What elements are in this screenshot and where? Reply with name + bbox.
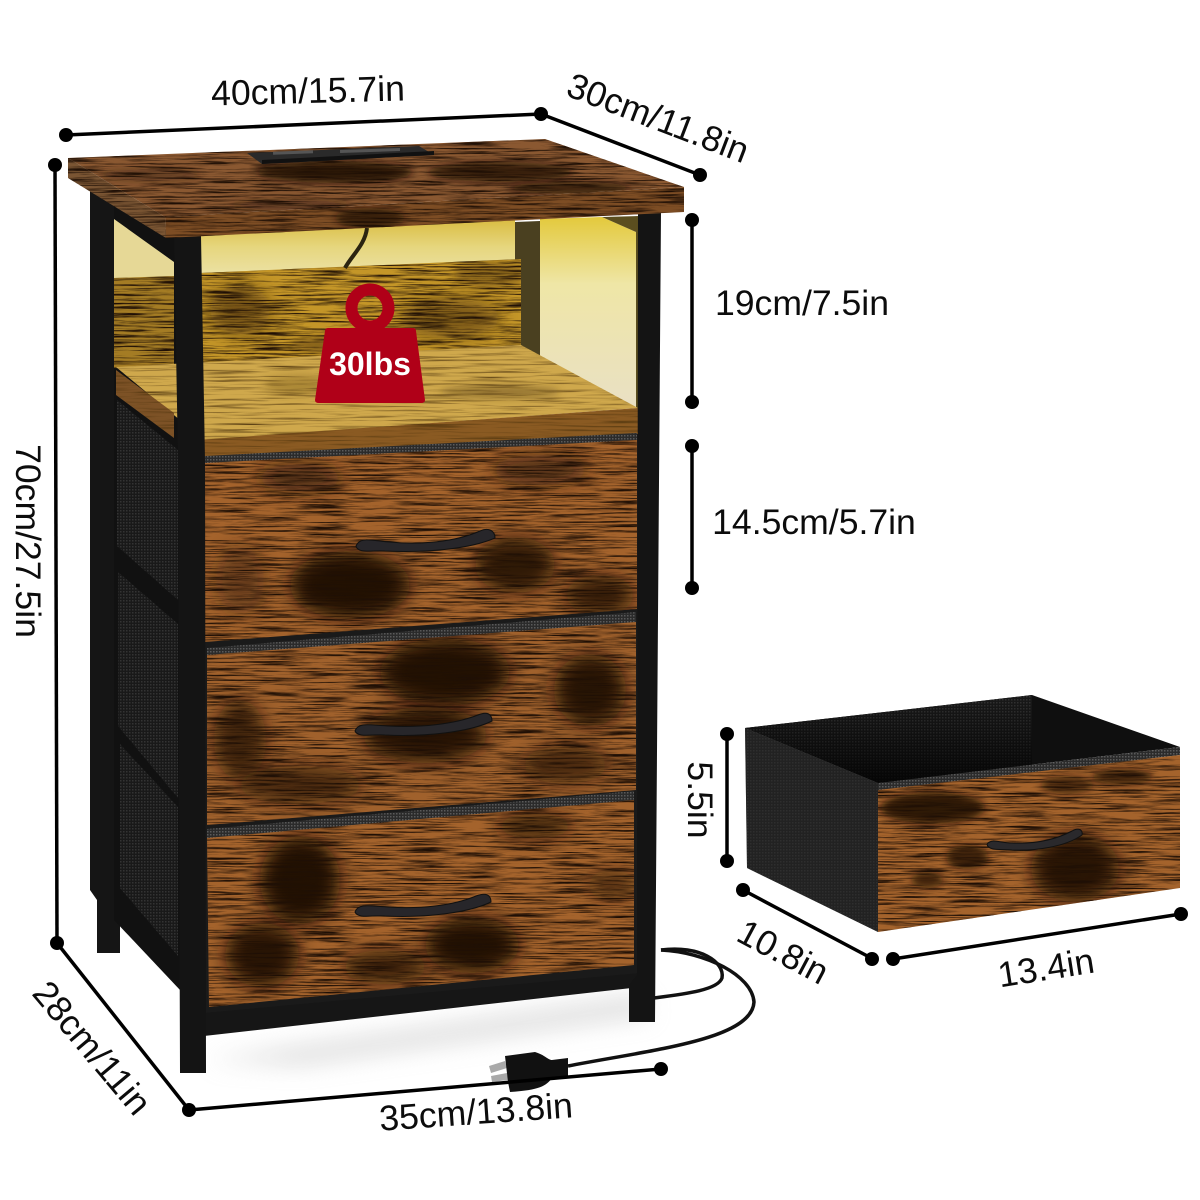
dimension: drawer front 14.5cm: 14.5cm/5.7in [712,502,916,542]
inner rear post [515,221,540,356]
drawer interior [745,695,1180,783]
tabletop left edge [68,158,166,238]
olive strip at right [602,216,640,410]
drawer 3 fabric strip [207,791,634,840]
dimension: lower depth 28cm [25,943,196,1123]
drawer handle [987,829,1082,850]
drawer 1 [200,433,640,645]
interior back wall shading [745,695,1032,783]
dimension: drawer width 13.4in: 13.4in [995,941,1097,995]
shelf top [116,345,638,440]
illuminated back wall [200,218,515,276]
drawer 2 handle [355,713,492,735]
dimension: drawer depth 10.8in [731,883,879,992]
right front post [629,212,661,1022]
drawer 3 handle [355,894,491,916]
cord loops [654,949,722,998]
dimension: lower width 35cm [189,1062,668,1139]
drawer 2 wood front [207,622,636,825]
back left post [90,190,120,953]
weight ring [352,290,388,326]
dimension: width 40cm: 40cm/15.7in [211,68,405,114]
left side frame backing [114,205,180,990]
weight badge: 30lbs [315,290,425,403]
drawer 3 [200,791,640,1010]
left side fabric panel 3 [120,744,178,956]
power cord from top [345,228,367,268]
weight body [315,328,425,403]
tabletop front edge [160,185,690,240]
front frame backing [200,430,640,1015]
drawer 3 wood front [200,795,640,1010]
dimension: drawer width 13.4in [886,907,1188,995]
dimension: opening 19cm: 19cm/7.5in [715,283,889,323]
drawer 2 [200,610,640,830]
dimension: lower depth 28cm: 28cm/11in [25,973,159,1123]
left side illuminated opening [114,219,174,282]
dimension: drawer height 5.5in: 5.5in [680,761,720,839]
left side fabric panel 2 [118,572,178,798]
dimension: lower width 35cm: 35cm/13.8in [378,1085,574,1139]
dimension: drawer front 14.5cm [685,439,916,595]
bottom rail [204,973,640,1036]
dimension: opening 19cm [685,213,889,409]
shelf front edge [198,408,638,460]
shelf left edge [116,370,174,438]
interior back wall mesh [745,695,1032,783]
weight label: 30lbs [329,346,411,382]
dimension: drawer height 5.5in [680,727,734,868]
drawer 1 wood front [200,435,640,645]
drawer rim [878,747,1180,791]
drawer side [745,728,878,932]
dimension: height 70cm: 70cm/27.5in [8,444,48,638]
drawer 1 handle [356,529,495,551]
dimension: height 70cm [8,158,64,950]
back board of shelf [202,259,521,362]
dimension: depth 30cm: 30cm/11.8in [562,65,754,171]
left side back board [114,276,174,370]
power strip [247,146,434,164]
loose drawer [745,695,1185,935]
left side fabric panel 1 [117,400,178,600]
drawer 2 fabric strip [207,612,636,657]
left front post [174,236,206,1073]
drawer 1 fabric strip [205,433,637,465]
tabletop [60,135,690,240]
tabletop surface [68,139,684,217]
dimension: drawer depth 10.8in: 10.8in [731,912,835,992]
dimension: width 40cm [59,68,548,142]
floor shadow [205,995,650,1065]
right illuminated panel [540,217,636,408]
plug body [505,1052,568,1092]
plug prongs [489,1061,508,1082]
power cord and plug [489,949,754,1092]
nightstand [60,135,754,1092]
drawer wood front [875,750,1185,935]
